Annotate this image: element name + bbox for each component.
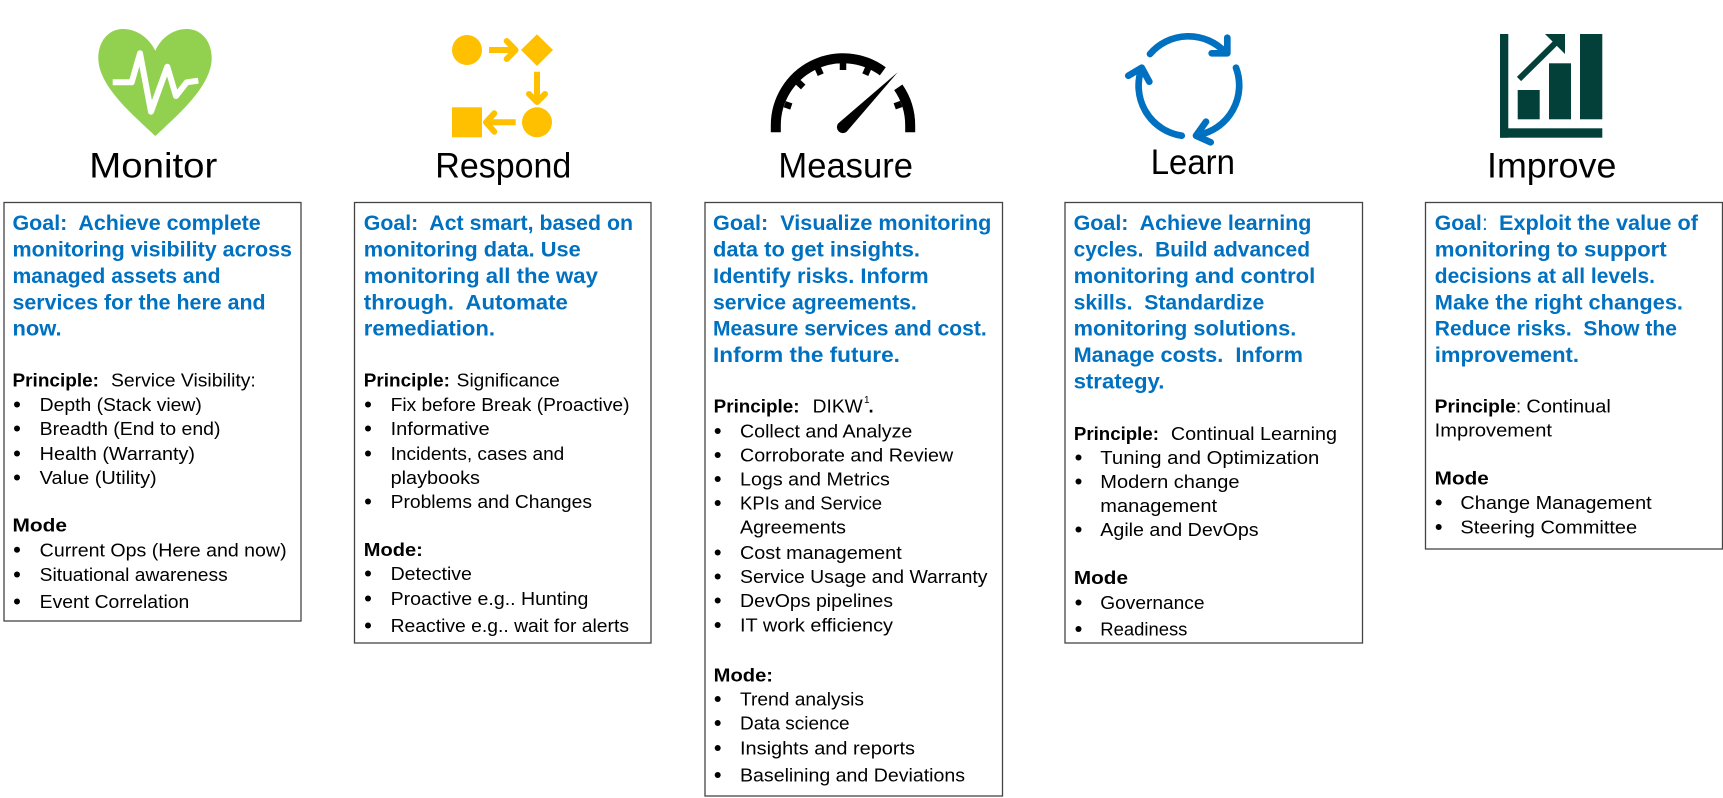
mode list (1074, 567, 1204, 640)
principle list: Breadth (End to end) (40, 418, 221, 439)
icon: dark teal bar chart with rising arrow (1500, 34, 1602, 138)
mode list: Event Correlation (40, 591, 189, 612)
principle list: . (868, 396, 874, 417)
mode list: Current Ops (Here and now) (40, 539, 287, 560)
principle list: Informative (391, 418, 490, 439)
mode list: Situational awareness (40, 564, 228, 585)
principle list: management (1100, 495, 1217, 516)
mode list: Reactive e.g.. wait for alerts (391, 615, 629, 636)
goal text: Goal: Act smart, based on (364, 212, 633, 235)
principle list: Tuning and Optimization (1100, 447, 1319, 468)
goal text: managed assets and (12, 265, 220, 288)
principle list: Collect and Analyze (740, 421, 912, 442)
goal text: Identify risks. Inform (713, 265, 929, 288)
heading: Respond: Respond (435, 146, 571, 186)
principle list: Fix before Break (Proactive) (391, 394, 630, 415)
principle list: Principle: (12, 370, 99, 391)
principle list: Principle: (714, 396, 800, 417)
principle list: 1 (864, 395, 870, 406)
principle list: Continual Learning (1171, 423, 1337, 444)
principle list: Agreements (740, 517, 846, 538)
panel: Learn details (1065, 202, 1362, 643)
panel: Measure details (705, 202, 1002, 796)
heading: Measure: Measure (778, 146, 913, 186)
principle text: Improvement (1435, 420, 1552, 441)
goal text (713, 212, 991, 367)
principle list: DIKW (813, 396, 863, 417)
mode list: Mode (1435, 468, 1489, 489)
goal text: Inform the future. (713, 344, 900, 367)
principle text: : (1516, 396, 1521, 417)
goal text: Exploit the value of (1499, 212, 1699, 235)
goal text (1435, 212, 1699, 367)
column: Measure (705, 58, 1002, 796)
panel: Improve details (1426, 202, 1722, 549)
principle list: Corroborate and Review (740, 445, 954, 466)
goal text: monitoring solutions. (1074, 318, 1296, 341)
icon: yellow process flow (452, 34, 553, 137)
goal text: : (1482, 212, 1488, 235)
goal text: strategy. (1074, 370, 1164, 394)
mode list: Steering Committee (1460, 517, 1637, 538)
goal text: monitoring and control (1074, 265, 1315, 288)
principle list (364, 370, 630, 512)
principle list: Service Usage and Warranty (740, 566, 988, 587)
goal text: through. Automate (364, 292, 568, 315)
goal text: remediation. (364, 318, 495, 341)
principle list: Service Visibility: (111, 370, 256, 391)
goal text: Goal: Visualize monitoring (713, 212, 991, 235)
goal text: Measure services and cost. (713, 318, 987, 341)
mode list: Proactive e.g.. Hunting (391, 588, 588, 609)
goal text: service agreements. (713, 292, 917, 315)
goal text: cycles. Build advanced (1074, 239, 1310, 262)
goal text: improvement. (1435, 344, 1579, 367)
principle text: Principle (1435, 396, 1516, 417)
mode list: Mode (12, 515, 67, 536)
principle list: Cost management (740, 542, 902, 563)
goal text: monitoring to support (1435, 239, 1667, 262)
principle list: playbooks (391, 467, 480, 488)
mode list (1435, 468, 1652, 538)
icon: black gauge (776, 58, 910, 133)
mode list (364, 539, 629, 636)
mode list: Mode: (364, 539, 423, 560)
goal text: now. (12, 318, 62, 341)
principle text: Continual (1526, 396, 1611, 417)
mode list: Change Management (1460, 492, 1652, 513)
principle list: IT work efficiency (740, 615, 894, 636)
heading: Monitor: Monitor (89, 146, 217, 186)
goal text: monitoring visibility across (12, 239, 292, 262)
goal text: monitoring all the way (364, 265, 598, 288)
goal text: Goal (1435, 212, 1482, 235)
principle list: Principle: (1074, 423, 1159, 444)
goal text: Reduce risks. Show the (1435, 318, 1677, 341)
principle list: Value (Utility) (40, 467, 157, 488)
mode list: Trend analysis (740, 689, 864, 710)
goal text: Manage costs. Inform (1074, 344, 1303, 367)
icon: green heart with pulse line (98, 29, 212, 136)
principle text (1435, 396, 1611, 441)
principle list: Health (Warranty) (40, 443, 195, 464)
column: Respond (354, 34, 651, 643)
goal text (1074, 212, 1315, 394)
goal text: data to get insights. (713, 239, 920, 262)
mode list: Data science (740, 713, 850, 734)
mode list: Baselining and Deviations (740, 765, 965, 786)
principle list: DevOps pipelines (740, 590, 893, 611)
goal text: Goal: Achieve learning (1074, 212, 1311, 235)
goal text (364, 212, 633, 341)
mode list (12, 515, 287, 612)
column: Learn (1065, 36, 1362, 643)
mode list: Readiness (1100, 619, 1187, 640)
principle list (1074, 423, 1337, 540)
principle list: Problems and Changes (391, 491, 592, 512)
mode list: Mode (1074, 567, 1128, 588)
principle list: Principle: (364, 370, 450, 391)
principle list (12, 370, 256, 488)
column: Monitor (4, 29, 301, 621)
panel: Monitor details (4, 202, 301, 621)
mode list: Mode: (714, 665, 773, 686)
goal text: Make the right changes. (1435, 292, 1683, 315)
goal text: services for the here and (12, 292, 266, 315)
goal text: monitoring data. Use (364, 239, 581, 262)
mode list: Insights and reports (740, 738, 915, 759)
goal text: Goal: Achieve complete (12, 212, 261, 235)
column: Improve (1426, 34, 1722, 549)
goal text: skills. Standardize (1074, 292, 1264, 315)
principle list: Significance (457, 370, 560, 391)
principle list: Logs and Metrics (740, 469, 890, 490)
principle list (714, 395, 988, 636)
principle list: Modern change (1100, 471, 1240, 492)
icon: blue cycle arrows (1128, 36, 1239, 142)
panel: Respond details (354, 202, 651, 643)
principle list: Incidents, cases and (391, 443, 564, 464)
mode list (714, 665, 965, 786)
principle list: Agile and DevOps (1100, 519, 1259, 540)
goal text (12, 212, 292, 341)
principle list: Depth (Stack view) (40, 394, 202, 415)
mode list: Detective (391, 563, 472, 584)
heading: Learn: Learn (1151, 142, 1235, 182)
heading: Improve: Improve (1487, 146, 1616, 186)
principle list: KPIs and Service (740, 493, 882, 514)
mode list: Governance (1100, 592, 1204, 613)
goal text: decisions at all levels. (1435, 265, 1655, 288)
